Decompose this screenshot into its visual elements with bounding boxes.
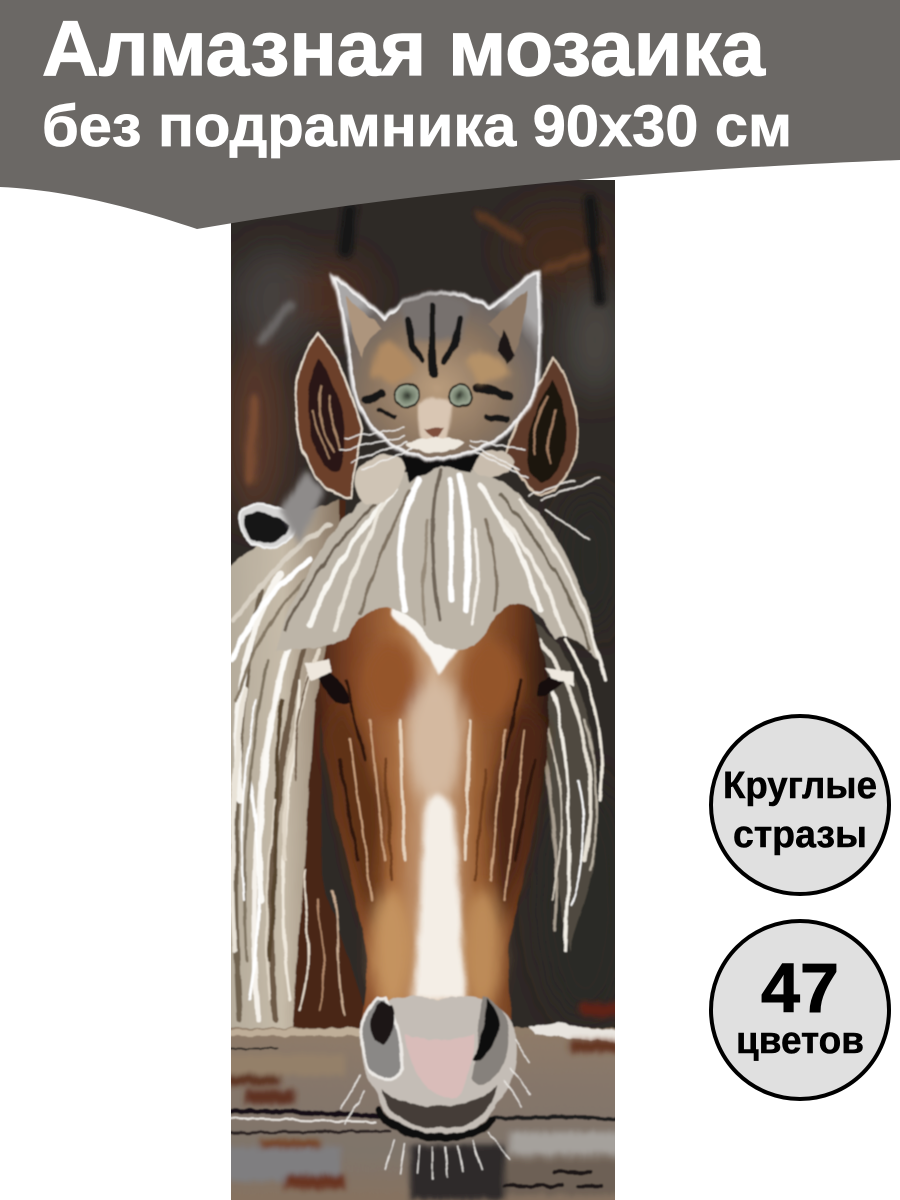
whiskers	[340, 428, 528, 478]
fence	[225, 1022, 621, 1200]
eye right	[536, 676, 564, 697]
nostril left	[361, 998, 402, 1080]
painting background	[231, 180, 615, 1030]
eye left	[318, 670, 350, 705]
badge: round rhinestones	[711, 716, 889, 894]
forehead stripes	[400, 294, 470, 340]
whiskers	[340, 1040, 530, 1180]
horse ears	[295, 334, 578, 498]
kitten	[336, 275, 538, 505]
painting: kitten on a horse	[223, 175, 630, 1200]
paws	[356, 454, 405, 505]
forelock and top mane	[275, 464, 605, 680]
badge: round rhinestones: стразы	[733, 814, 867, 856]
forehead star	[389, 608, 460, 676]
mane behind the head, left	[225, 500, 372, 1030]
kitten fur glow	[336, 275, 538, 457]
inner ears	[345, 296, 382, 360]
nostril right	[472, 996, 509, 1084]
blaze	[412, 795, 466, 1000]
banner	[0, 0, 900, 229]
badge: 47 colours	[711, 921, 889, 1099]
left ear	[295, 334, 362, 498]
chin line	[380, 1110, 492, 1137]
badge: 47 colours: цветов	[736, 1020, 864, 1062]
face shading	[325, 640, 545, 1010]
mane behind the head, right	[530, 620, 602, 950]
head and ears	[336, 275, 538, 457]
badge: round rhinestones: Круглые	[723, 765, 877, 807]
right ear	[505, 358, 578, 494]
title: Алмазная мозаика	[42, 4, 766, 92]
subtitle: без подрамника 90х30 см	[42, 94, 792, 159]
badge: 47 colours: 47	[761, 949, 839, 1027]
kitten nose	[424, 428, 444, 439]
horse head	[305, 578, 574, 1020]
kitten eyes	[395, 385, 419, 407]
muzzle	[340, 996, 530, 1180]
kitten tail	[239, 470, 325, 548]
